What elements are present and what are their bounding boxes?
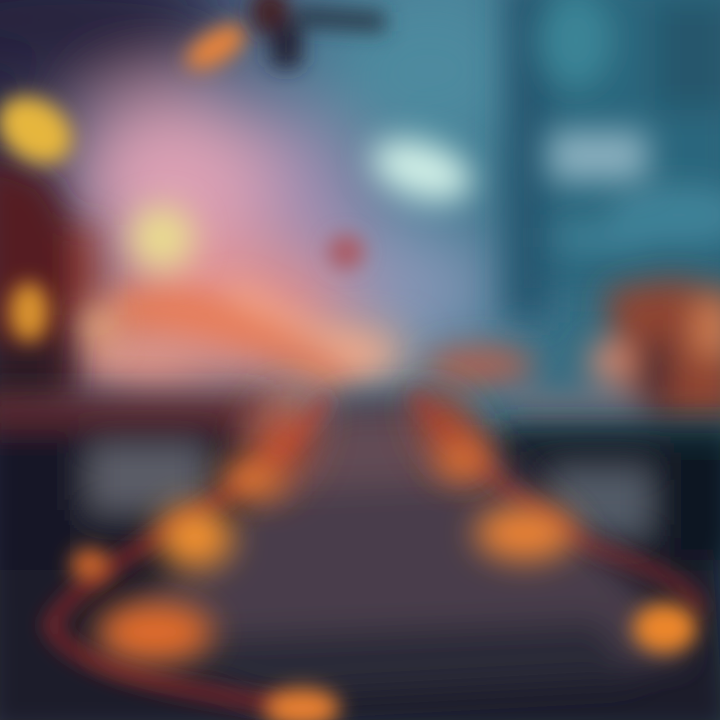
lantern: bottom left xyxy=(97,602,213,662)
lantern: bottom right xyxy=(633,603,697,653)
right building xyxy=(425,278,720,425)
left building xyxy=(0,150,103,420)
plane body and wing xyxy=(250,0,385,68)
small red spot in sky xyxy=(328,235,364,269)
lantern: left middle xyxy=(157,505,233,569)
lantern: upper right xyxy=(437,440,489,480)
light: pale green glow xyxy=(130,206,194,270)
road surface xyxy=(90,395,690,700)
pale window block xyxy=(548,130,648,182)
red glow around the lanterns xyxy=(233,380,492,497)
lantern: right middle xyxy=(475,505,575,561)
right tower xyxy=(505,0,720,320)
white cloud xyxy=(364,127,480,213)
light: top left xyxy=(0,82,85,178)
horizon glow xyxy=(60,325,410,385)
lantern: bottom centre xyxy=(264,688,340,720)
road edge lines xyxy=(50,395,700,705)
ground base xyxy=(0,395,720,720)
lantern: upper left xyxy=(220,460,284,500)
plane engine flame xyxy=(179,15,253,79)
yellow lights xyxy=(0,82,194,346)
sky colour washes xyxy=(0,0,540,390)
light: left window xyxy=(9,282,49,342)
airplane xyxy=(179,0,385,79)
lantern: far left xyxy=(70,548,110,582)
orange light streak xyxy=(110,289,370,385)
lanterns xyxy=(70,440,697,720)
light: pale orange window xyxy=(80,306,116,346)
